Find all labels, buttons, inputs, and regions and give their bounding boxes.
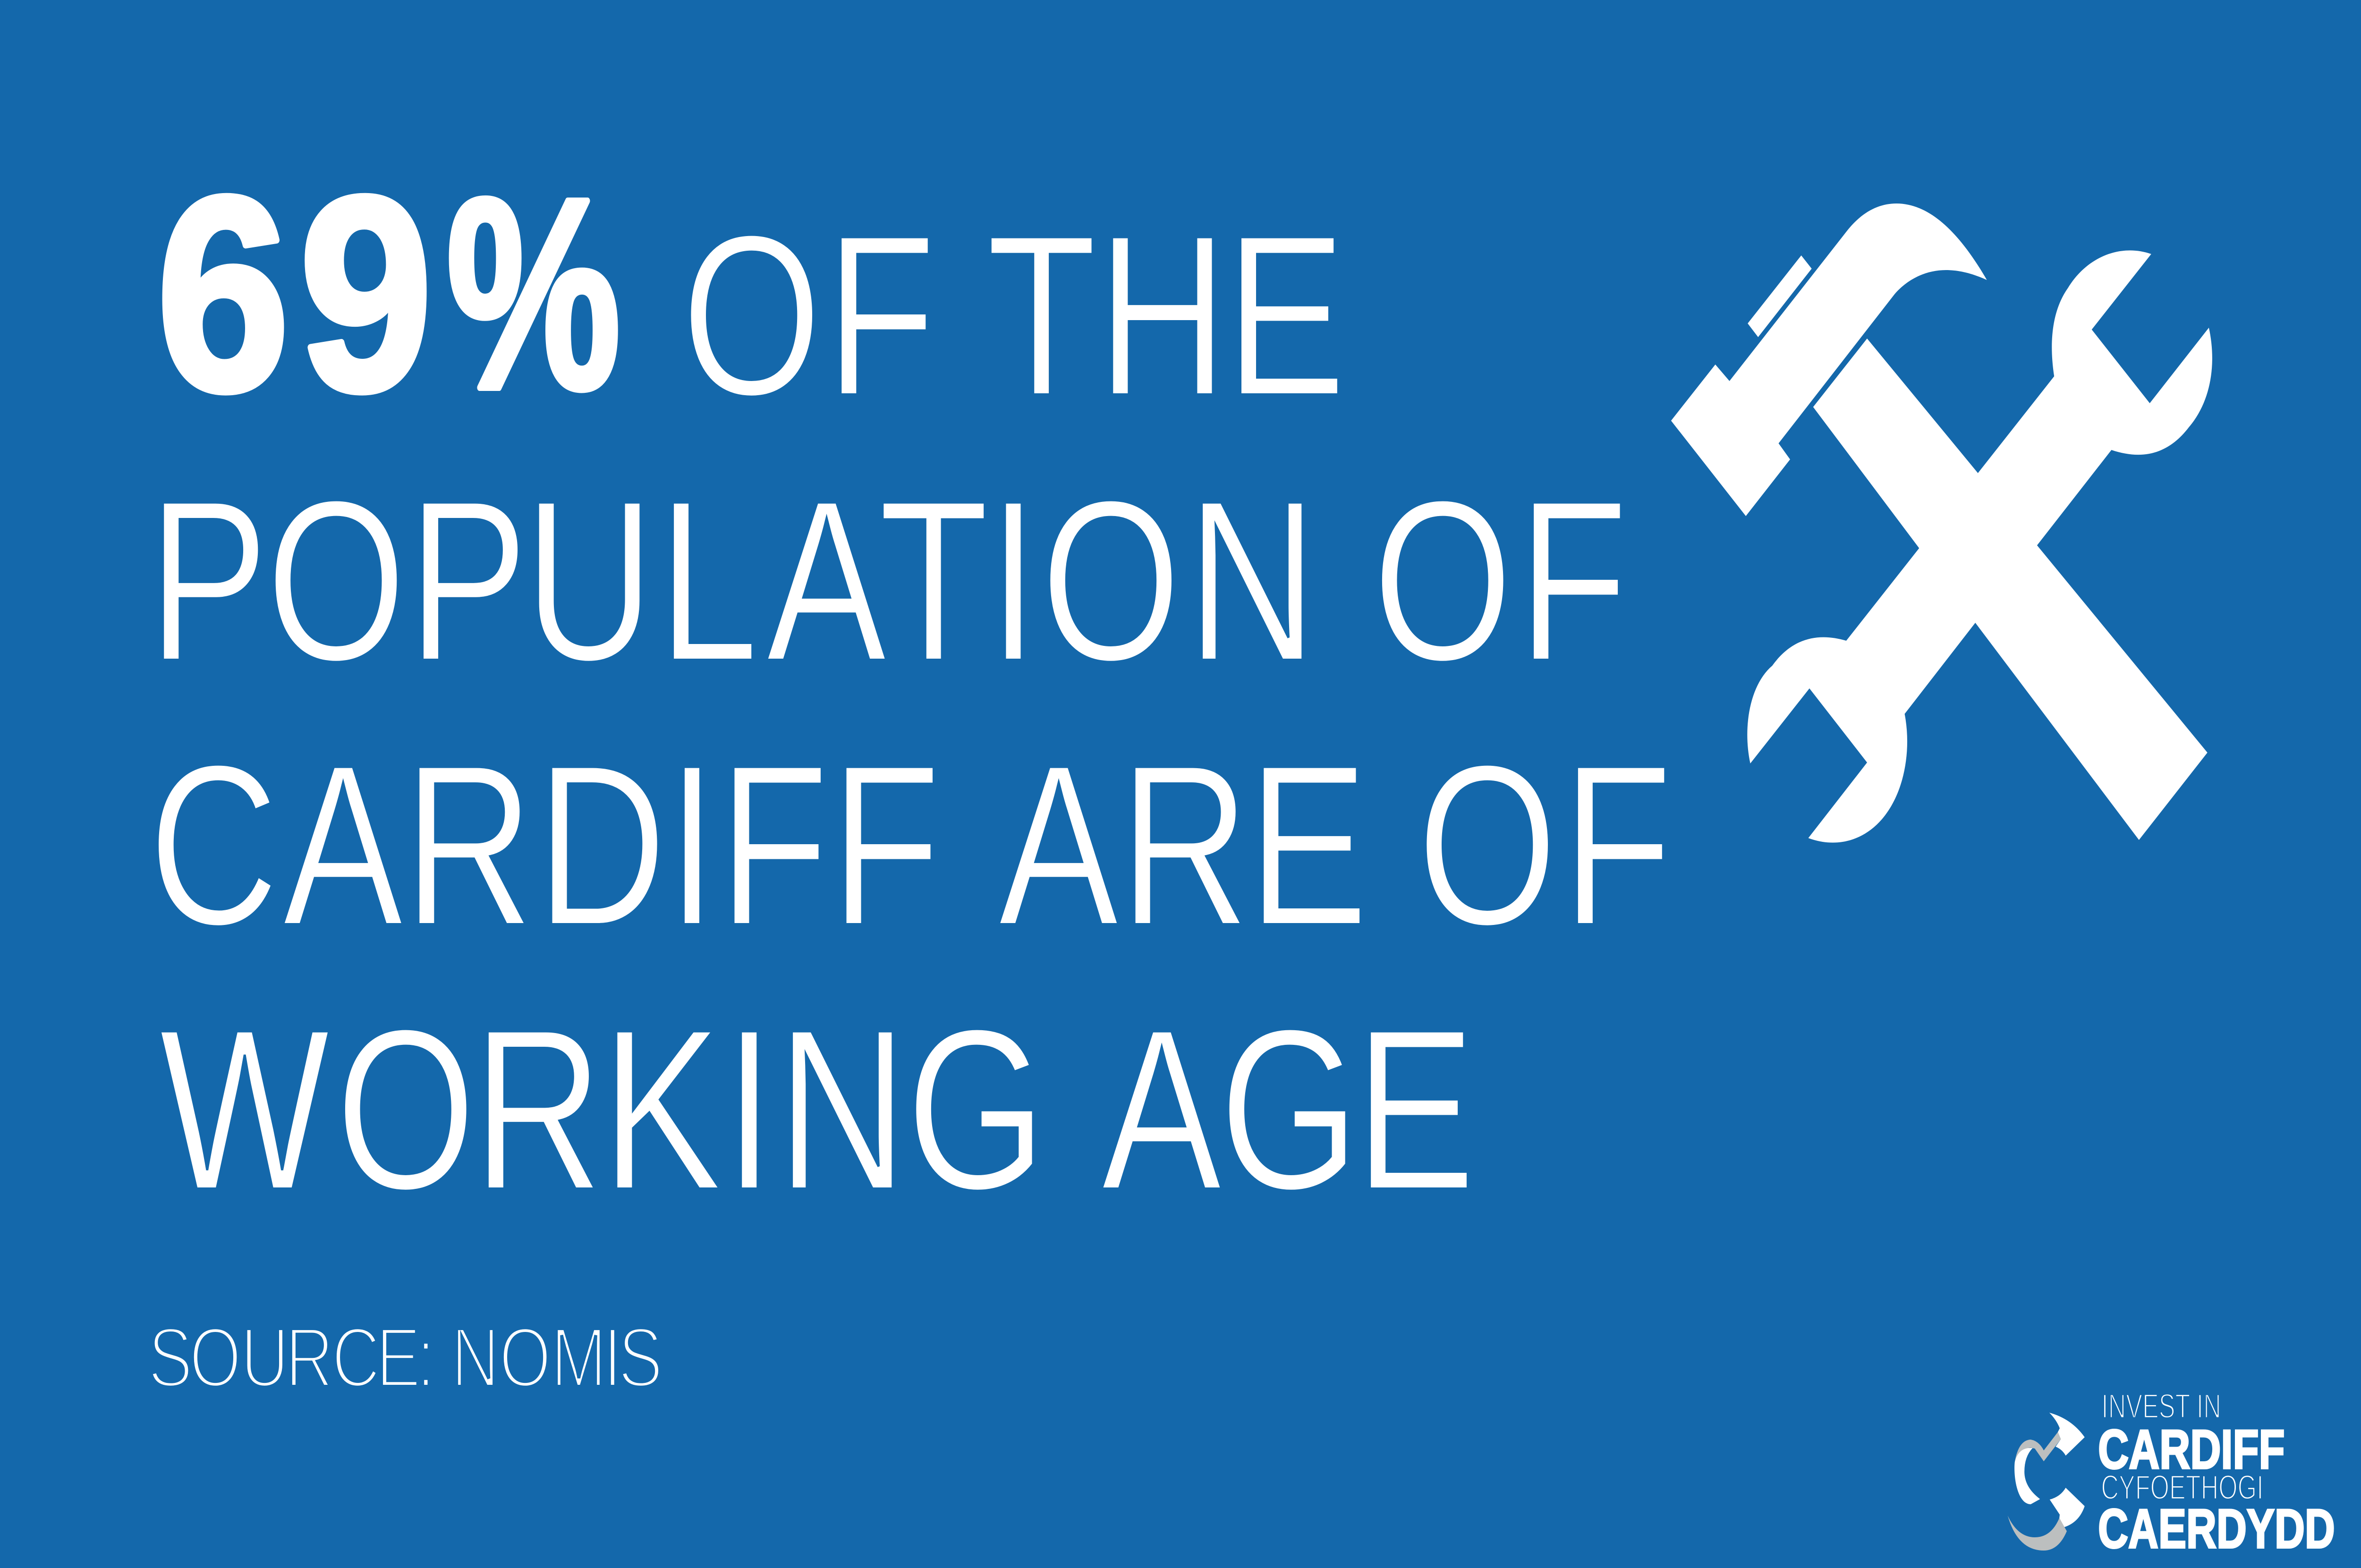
hammer handle and double-ended spanner <box>1747 250 2212 843</box>
statistic: 69%: 69 <box>156 140 433 449</box>
source note: SOURCE: NOMIS <box>148 1310 663 1405</box>
logo text: Cardiff: CARDIFF <box>2098 1419 2285 1481</box>
icon: crossed hammer and spanner <box>1671 203 2212 843</box>
logo text: Cyfoethogi: CYFOETHOGI <box>2101 1468 2264 1507</box>
statistic: 69%: % <box>446 143 621 446</box>
headline line 4: WORKING AGE <box>159 981 1476 1237</box>
logo mark <box>2008 1413 2085 1551</box>
logo: Invest in Cardiff / Cyfoethogi Caerdydd <box>2008 1387 2335 1560</box>
hammer head <box>1671 203 1987 516</box>
headline line 3: CARDIFF ARE OF <box>148 717 1673 973</box>
headline line 2: POPULATION OF <box>148 452 1628 709</box>
logo text: Caerdydd: CAERDYDD <box>2098 1499 2335 1560</box>
headline line 1: OF THE <box>681 187 1346 443</box>
logo text: Invest in: INVEST IN <box>2101 1387 2221 1425</box>
hammer highlight bar <box>1748 255 1812 337</box>
statistic: 69% <box>156 140 621 449</box>
headline <box>148 140 1673 1237</box>
